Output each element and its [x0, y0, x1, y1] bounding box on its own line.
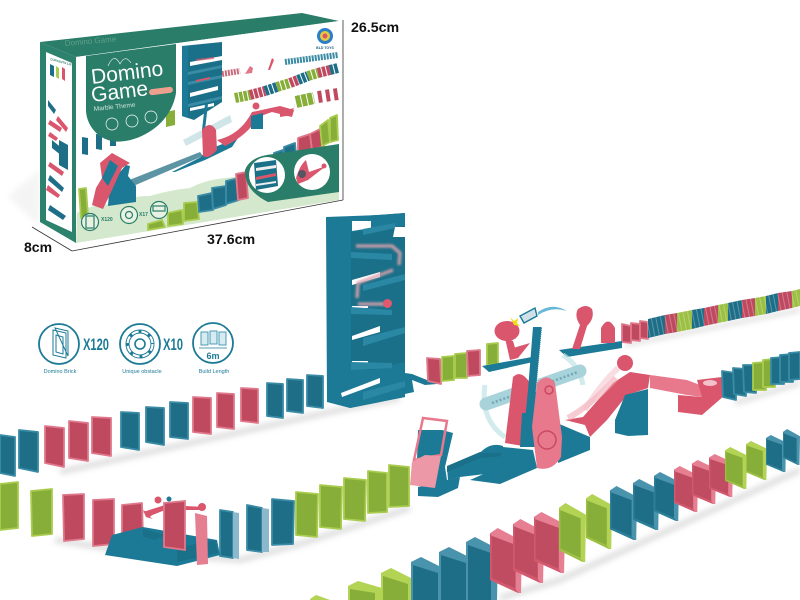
launcher base, right	[557, 423, 590, 463]
box title: Domino	[90, 57, 164, 89]
lever paddle	[494, 321, 530, 360]
tower side wall	[326, 217, 405, 408]
box front face	[76, 21, 339, 243]
box title: Game	[90, 77, 149, 107]
lever obstacle with paddle and arch	[559, 306, 622, 357]
feature icon: build length: Build Length	[199, 369, 229, 375]
base	[559, 341, 622, 357]
box bottom icons: X17	[139, 212, 148, 218]
left pink bracket	[505, 374, 530, 447]
impact star	[510, 317, 520, 326]
box title	[90, 57, 164, 113]
launcher rail	[447, 445, 503, 480]
feature icon: unique obstacle	[120, 324, 183, 375]
box feature icons	[106, 111, 157, 130]
flying domino	[520, 308, 537, 323]
obstacle falling domino	[195, 513, 208, 565]
light side edges of teal dominoes	[233, 508, 269, 559]
dimension label: height: 26.5cm	[351, 20, 399, 36]
launcher pink frame	[410, 418, 447, 488]
inset: tower closeup	[249, 157, 285, 193]
marble motion trail	[356, 246, 400, 304]
box front: green title arch	[86, 44, 176, 142]
box mechanism illustration	[92, 102, 295, 209]
inset: launcher closeup	[294, 154, 330, 190]
box left side panel: CONTENTS LIST	[50, 57, 74, 67]
box top face: Domino Game	[64, 34, 117, 48]
box title: Marble Theme	[93, 102, 136, 113]
arch	[601, 322, 615, 343]
shadows under domino rows	[55, 310, 800, 598]
dimension label: width: 37.6cm	[207, 232, 255, 248]
launcher tower	[417, 430, 460, 497]
bridge	[650, 375, 702, 397]
feature icon: unique obstacle: Unique obstacle	[122, 369, 162, 375]
box front: light green ground band	[76, 165, 339, 243]
ramp	[565, 372, 650, 437]
obstacle upright	[164, 501, 185, 550]
lever obstacle with red paddle	[482, 307, 567, 372]
box side shadow	[8, 170, 66, 240]
box front dominoes	[79, 115, 338, 230]
obstacle arm	[143, 496, 206, 519]
box front: tiny domino rows	[82, 55, 338, 155]
obstacle base	[105, 527, 220, 566]
dimension label: depth: 8cm	[24, 239, 52, 255]
feature icon: domino brick	[39, 324, 109, 375]
feature icon: build length: 6m	[206, 351, 220, 361]
paddle	[572, 306, 593, 349]
box dimension lines	[32, 20, 343, 251]
launcher base, middle	[470, 447, 537, 484]
box logo: BLD TOYS	[316, 46, 334, 50]
feature icon: domino brick: Domino Brick	[44, 369, 77, 375]
box left side panel	[40, 42, 76, 243]
box tower illustration	[182, 42, 222, 120]
front domino row	[310, 429, 800, 600]
middle domino row, left	[0, 465, 409, 558]
domino row behind marble tower	[0, 375, 323, 476]
teal pole	[525, 327, 542, 420]
box bottom icons	[82, 202, 168, 230]
box badge pill	[149, 87, 173, 95]
box logo	[316, 28, 334, 50]
box top face	[40, 13, 339, 57]
box inset panel	[245, 144, 339, 202]
pale spin arcs	[484, 355, 583, 437]
far domino row, top right	[622, 289, 800, 343]
small lever obstacle, bottom left	[105, 496, 220, 566]
tower shelves	[351, 223, 405, 400]
right middle domino row	[722, 352, 800, 400]
tower exit ramp	[405, 373, 437, 394]
middle row dominoes behind centre	[427, 343, 498, 384]
central launcher mechanism	[410, 327, 725, 497]
feature icon: build length	[193, 323, 233, 375]
transparent tube	[486, 371, 580, 404]
feature icon: unique obstacle: X10	[163, 335, 183, 354]
front pink plate	[532, 378, 562, 469]
feature icon: domino brick: X120	[83, 335, 109, 354]
bucket	[678, 377, 725, 415]
tower back	[350, 213, 405, 408]
tower cut-outs	[341, 221, 405, 397]
swoosh	[538, 307, 567, 315]
marble	[383, 299, 392, 308]
lever base	[482, 357, 533, 372]
ramp support pillar	[615, 389, 648, 436]
tower top band and frame	[326, 213, 405, 232]
launcher ball	[617, 355, 633, 371]
product box	[8, 13, 343, 251]
marble tower	[326, 213, 437, 408]
box bottom icons: X120	[101, 217, 113, 223]
